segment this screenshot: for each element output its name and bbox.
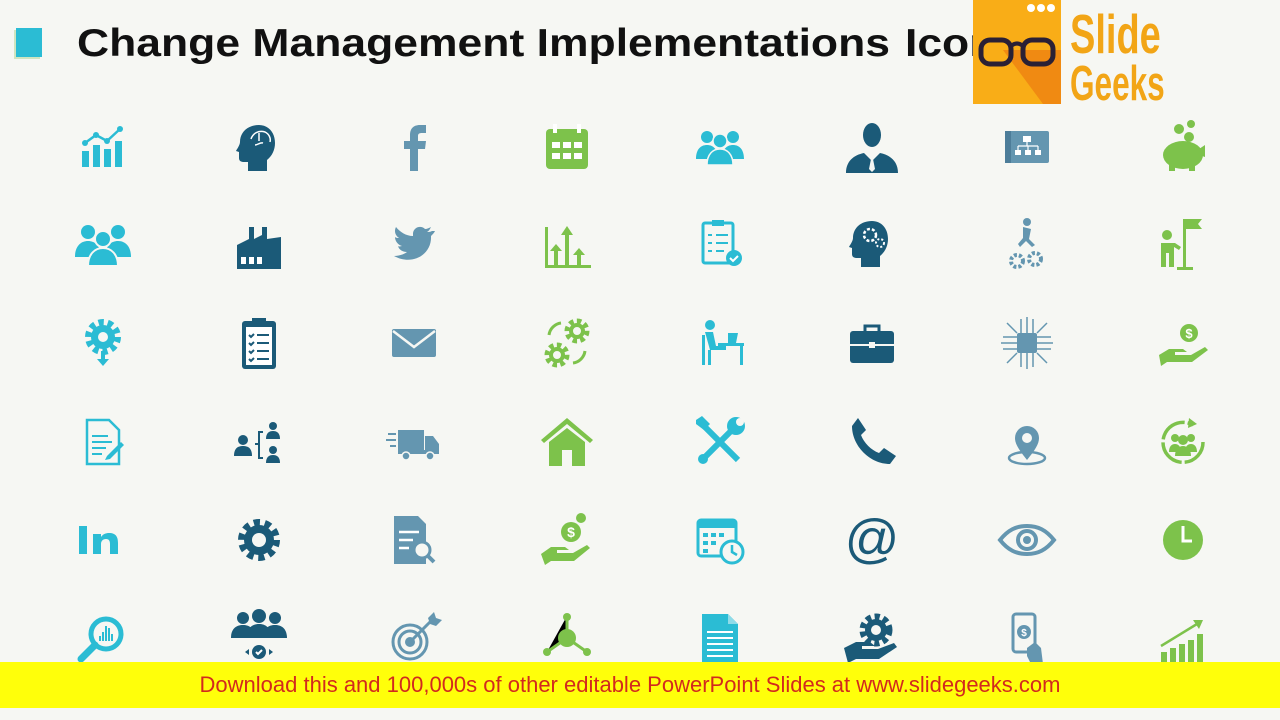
icon: network bbox=[537, 608, 597, 668]
icon: mobile money: $ bbox=[1021, 628, 1027, 639]
icon: search analytics bbox=[73, 608, 133, 668]
icon: brain head bbox=[236, 125, 275, 171]
icon: clock bbox=[1153, 510, 1213, 570]
title: Change Management Implementations bbox=[77, 22, 890, 65]
icon: team bbox=[696, 131, 744, 164]
banner text: Download this and 100,000s of other editable PowerPoint Slides at www.slidegeeks.com bbox=[200, 672, 1060, 697]
icon: document bbox=[690, 608, 750, 668]
icon: eye bbox=[997, 510, 1057, 570]
icon: group bbox=[75, 225, 131, 265]
icon: mail bbox=[392, 329, 436, 357]
icon: person on gears bbox=[1009, 218, 1043, 269]
icon: facebook bbox=[404, 125, 426, 171]
icon: calendar clock bbox=[696, 518, 744, 564]
icon: bar chart trend bbox=[82, 126, 123, 167]
title: Icons bbox=[905, 21, 1021, 64]
icon: tools bbox=[696, 416, 745, 464]
icon: person at desk bbox=[702, 320, 744, 365]
icon grid bbox=[75, 120, 1208, 662]
icon: factory bbox=[237, 227, 281, 269]
icon: businessman bbox=[846, 123, 898, 173]
icon: hand coin green: $ bbox=[567, 524, 575, 540]
icon: checklist clipboard bbox=[702, 220, 742, 266]
icon: document search bbox=[394, 516, 436, 564]
icon: document pen bbox=[86, 418, 124, 466]
icon: org structure bbox=[234, 422, 280, 463]
icon: people cycle bbox=[1161, 418, 1205, 464]
icon: gear down bbox=[85, 319, 121, 366]
icon: phone bbox=[852, 418, 896, 464]
icon: location pin bbox=[1008, 426, 1046, 466]
icon: blueprint bbox=[1005, 131, 1049, 163]
icon: piggy bank bbox=[1163, 120, 1205, 171]
icon: calendar bbox=[546, 124, 588, 169]
icon: gears bbox=[544, 318, 590, 368]
icon: growth arrows bbox=[545, 226, 591, 268]
icon: target bbox=[384, 608, 444, 668]
icon: hand coin: $ bbox=[1185, 326, 1193, 341]
icon: hand coin green bbox=[541, 513, 590, 565]
icon: team check bbox=[229, 608, 289, 668]
icon: person with flag bbox=[1161, 219, 1202, 270]
icon: clipboard bbox=[242, 318, 276, 369]
icon: house bbox=[541, 418, 593, 466]
icon: chip bbox=[1001, 317, 1053, 369]
icon: linkedin bbox=[79, 526, 118, 554]
logo: Slide bbox=[1070, 4, 1161, 66]
icon: twitter bbox=[394, 226, 435, 260]
icon: at sign: @ bbox=[845, 510, 899, 569]
logo bbox=[973, 0, 1173, 104]
title marker square bbox=[16, 28, 42, 57]
icon: hand gear bbox=[842, 608, 902, 668]
icon: hand coin bbox=[1159, 324, 1208, 366]
icon: briefcase bbox=[850, 324, 894, 363]
icon: mobile money bbox=[997, 608, 1057, 668]
footer banner bbox=[0, 662, 1280, 708]
icon: truck bbox=[386, 430, 439, 460]
icon: gear bbox=[238, 519, 280, 561]
icon: growth chart bbox=[1153, 608, 1213, 668]
icon: head gears bbox=[849, 221, 888, 267]
